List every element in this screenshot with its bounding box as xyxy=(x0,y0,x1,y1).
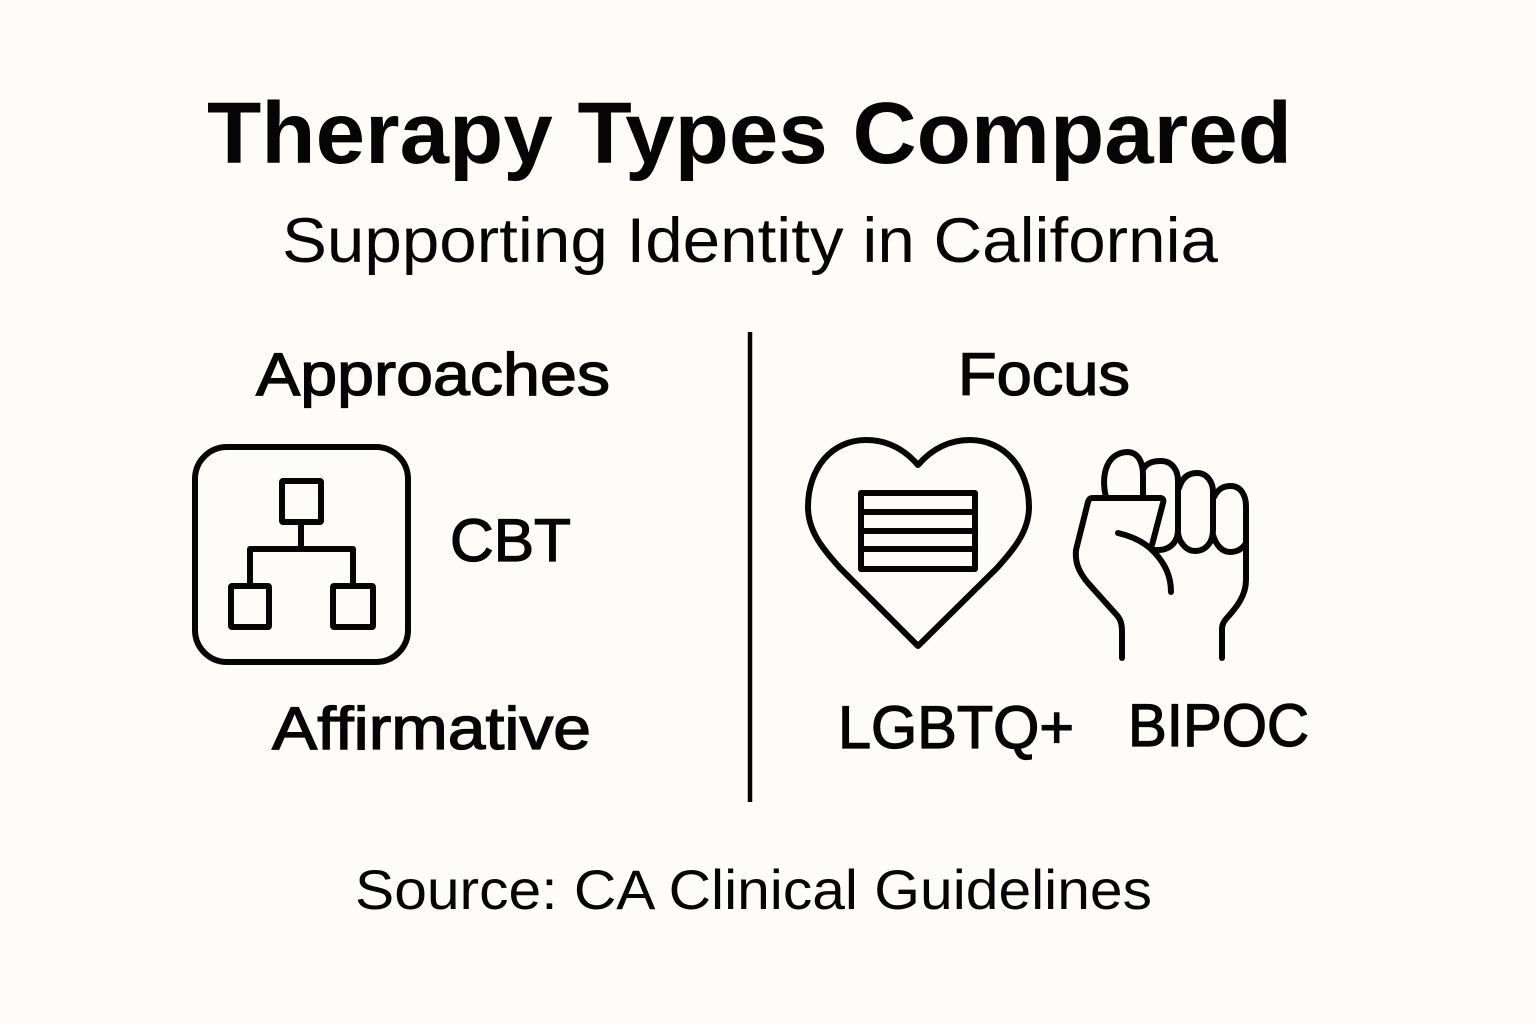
heading: approaches: Approaches xyxy=(256,341,610,408)
icon: heart with flag xyxy=(808,440,1029,646)
title: Therapy Types Compared xyxy=(207,85,1292,182)
source note: Source: CA Clinical Guidelines xyxy=(355,858,1152,921)
heading: focus: Focus xyxy=(958,341,1130,408)
label: BIPOC: BIPOC xyxy=(1128,692,1309,759)
subtitle: Supporting Identity in California xyxy=(282,206,1219,276)
label: CBT: CBT xyxy=(450,507,571,574)
label: Affirmative: Affirmative xyxy=(272,695,591,762)
icon: raised fist xyxy=(1076,452,1246,658)
label: LGBTQ+: LGBTQ+ xyxy=(838,694,1074,761)
icon: CBT flowchart xyxy=(195,447,408,662)
panel: focus xyxy=(808,341,1309,761)
panel: approaches xyxy=(195,341,610,762)
vertical divider xyxy=(748,332,752,802)
